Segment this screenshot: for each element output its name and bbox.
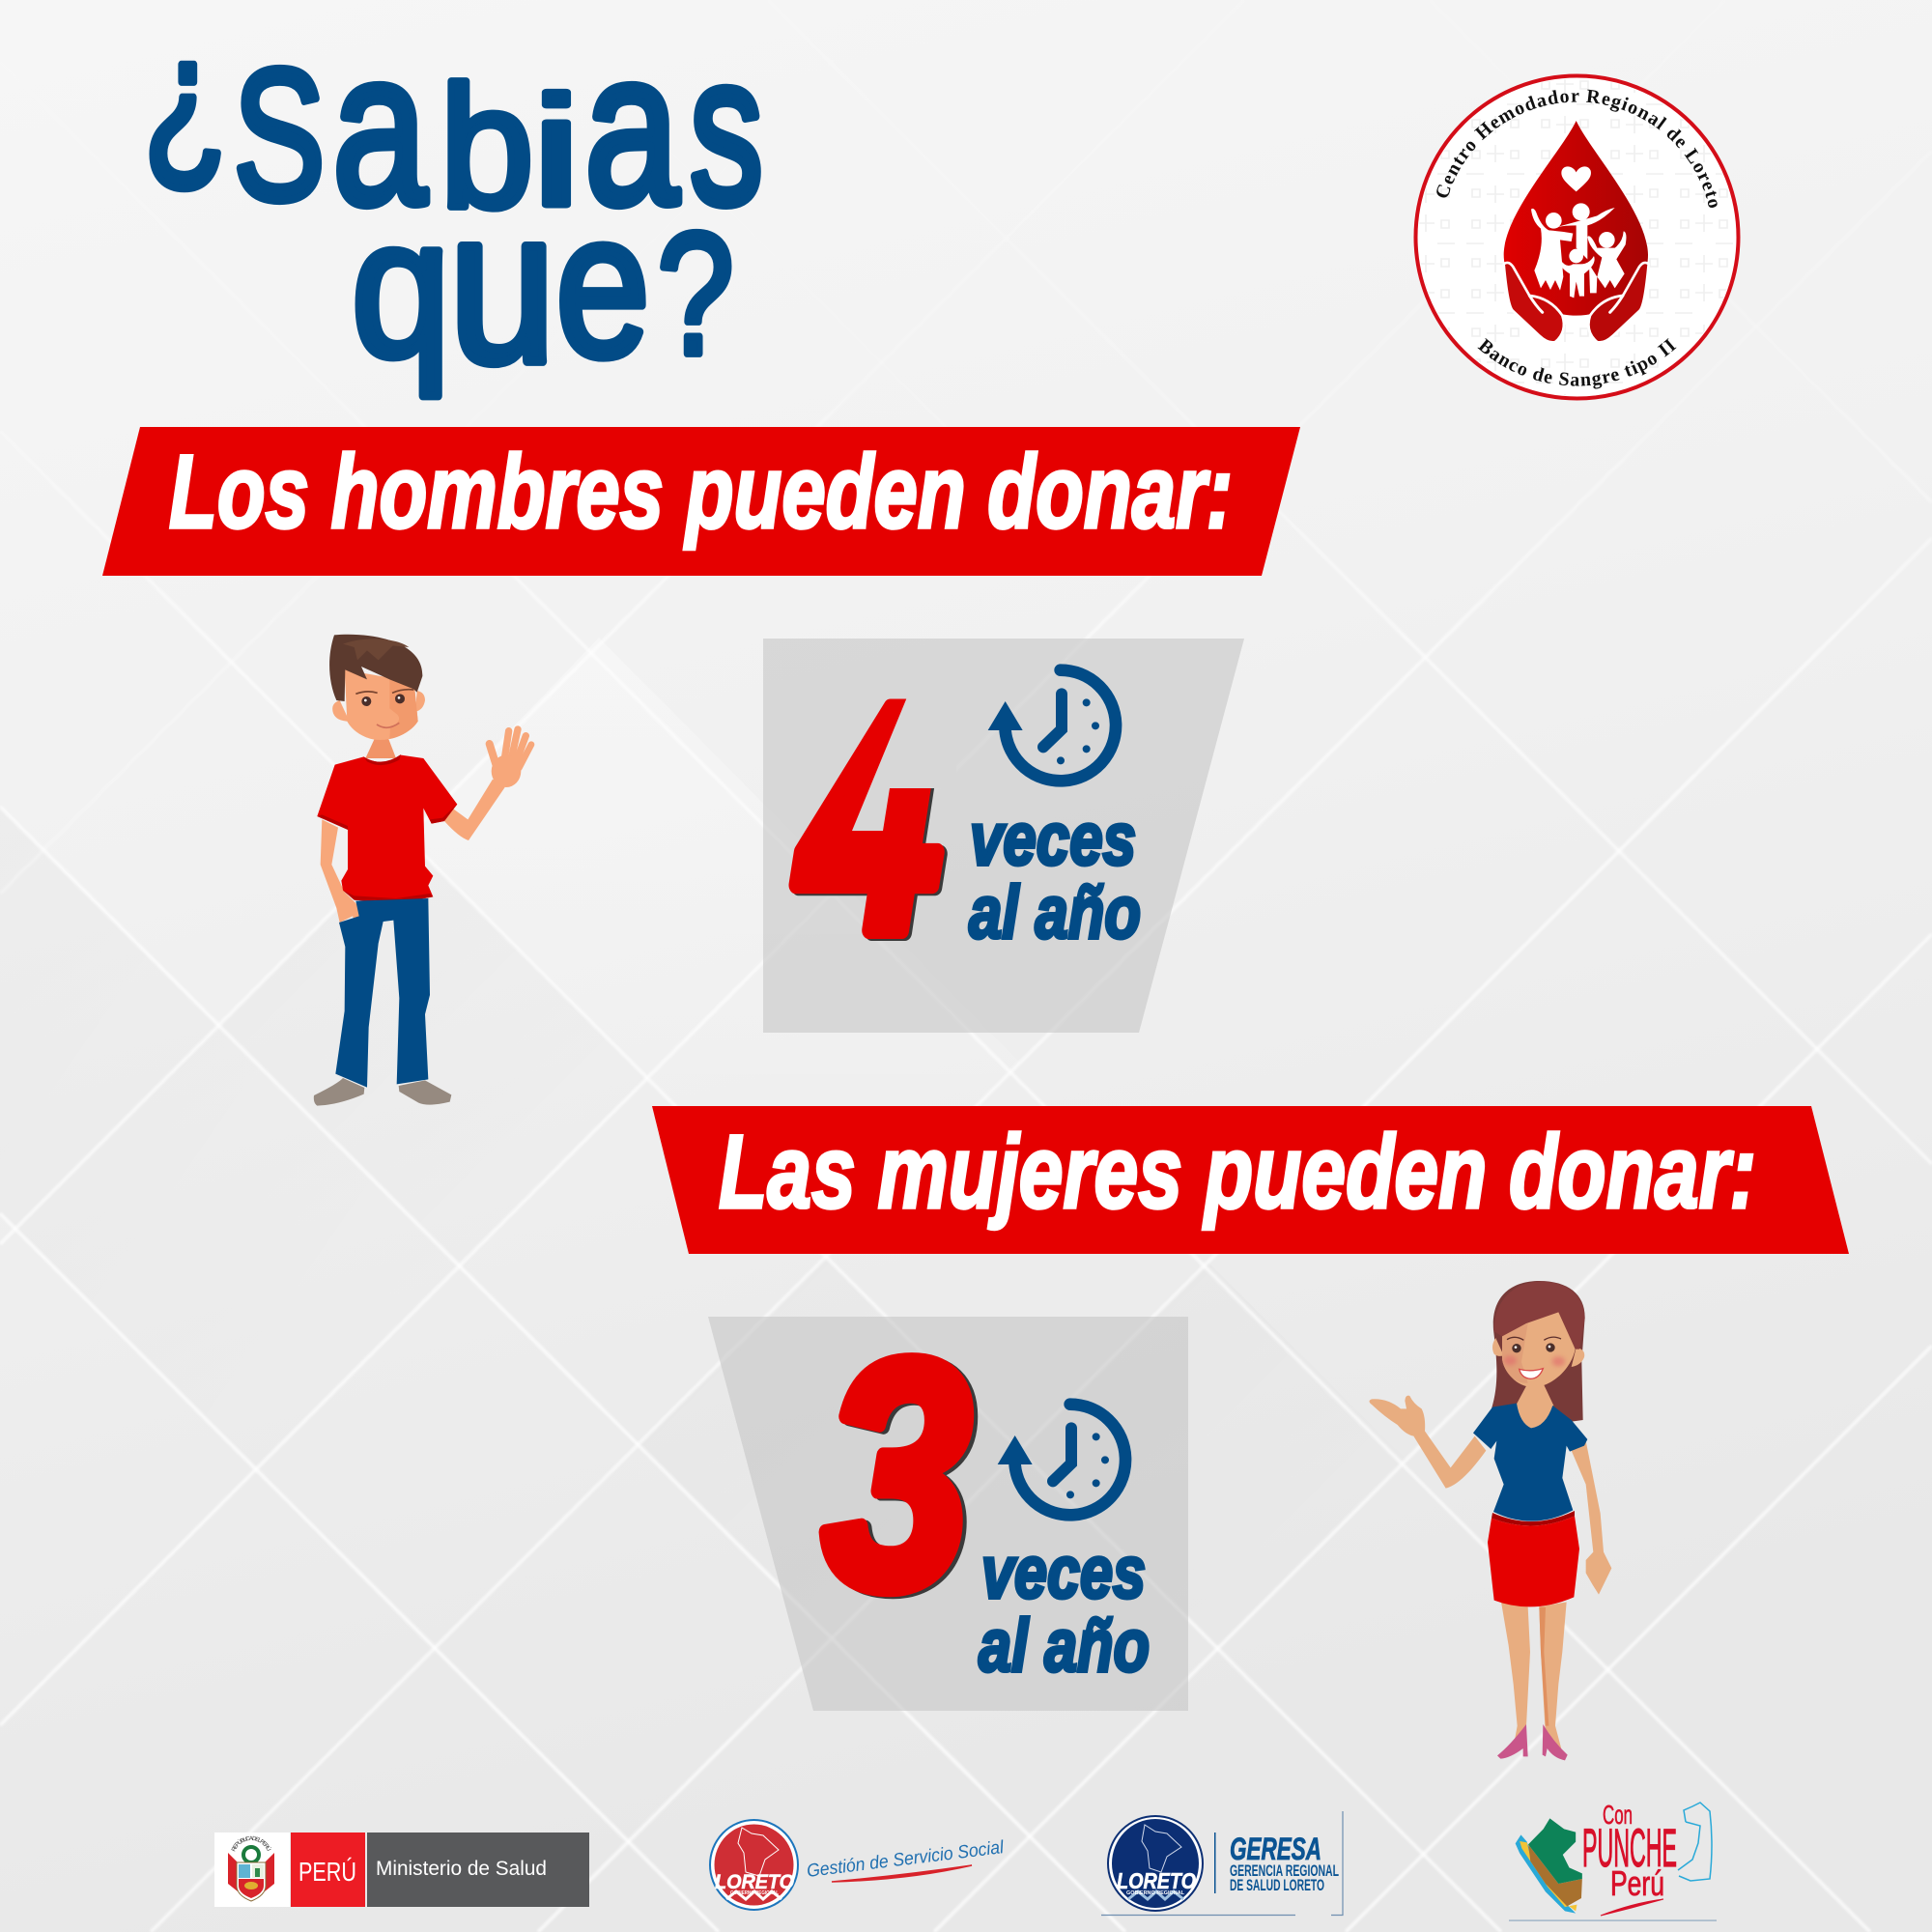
logo: GERESA Gerencia Regional de Salud Loreto: GOBIERNO REGIONAL [1126,1890,1184,1896]
logo: Centro Hemodador Regional de Loreto: Banco de Sangre tipo II [1478,338,1677,388]
text: veces al año: al año [979,1605,1150,1688]
title: ¿Sabias que?: S [233,30,326,239]
illustration: woman gesturing [1369,1281,1611,1760]
text: veces al año: veces [970,798,1136,881]
icon: clock with arrow [998,1405,1125,1515]
number 3: 3 [823,1293,971,1655]
logo: Centro Hemodador Regional de Loreto [1414,73,1741,400]
title: ¿Sabias que? [143,0,763,408]
logo: Loreto Gestión de Servicio Social: LORETO [715,1871,794,1893]
title: ¿Sabias que?: q [352,179,450,397]
logo: Loreto Gestión de Servicio Social: GOBIERNO REGIONAL [730,1890,779,1896]
logo: Loreto Gestión de Servicio Social [710,1820,1006,1910]
title: ¿Sabias que?: u [449,164,555,408]
title: ¿Sabias que?: i [531,65,582,239]
title: ¿Sabias que?: ? [657,197,734,391]
title: ¿Sabias que?: a [332,5,427,249]
title: ¿Sabias que?: b [440,50,534,243]
logo: Perú Ministerio de Salud: Ministerio de Salud [376,1858,547,1880]
logo: Con Punche Perú [1509,1800,1717,1921]
logo: GERESA Gerencia Regional de Salud Loreto [1101,1811,1343,1915]
banner: Los hombres pueden donar: Los hombres pueden donar: [169,433,1233,550]
number 4: 4 [795,639,945,1001]
icon: clock with arrow [988,670,1116,781]
logo: GERESA Gerencia Regional de Salud Loreto: GERENCIA REGIONAL [1230,1861,1339,1880]
number 4: 4 [792,638,942,999]
title: ¿Sabias que?: a [584,5,679,249]
text: veces al año: al año [969,871,1141,954]
panel: 3 veces al año [708,1293,1188,1711]
logo: Loreto Gestión de Servicio Social: Gestión de Servicio Social [806,1837,1006,1882]
logo: Perú Ministerio de Salud [214,1833,589,1907]
banner: Los hombres pueden donar [102,427,1300,576]
text: veces al año [979,1531,1150,1688]
title: ¿Sabias que?: e [555,171,650,400]
text: veces al año [969,798,1141,954]
logo: GERESA Gerencia Regional de Salud Loreto: GERESA [1230,1832,1321,1866]
panel: 4 veces al año [763,638,1244,1033]
logo: GERESA Gerencia Regional de Salud Loreto: DE SALUD LORETO [1230,1876,1324,1894]
logo: Con Punche Perú: Con [1603,1800,1633,1830]
text: veces al año: veces [981,1531,1146,1614]
illustration: man waving [314,635,531,1106]
title: ¿Sabias que?: ¿ [143,0,228,196]
logo: Con Punche Perú: PUNCHE [1582,1817,1677,1878]
logo: Con Punche Perú: Perú [1610,1863,1664,1903]
title: ¿Sabias que?: s [690,11,763,249]
number 3: 3 [827,1295,975,1657]
logo: Perú Ministerio de Salud: PERÚ [298,1857,356,1887]
background [0,641,1932,1932]
logo: Centro Hemodador Regional de Loreto: Centro Hemodador Regional de Loreto [1436,89,1718,208]
logo: Perú Ministerio de Salud: REPÚBLICA DEL PERÚ [231,1835,271,1851]
logo: GERESA Gerencia Regional de Salud Loreto: LORETO [1117,1868,1196,1893]
